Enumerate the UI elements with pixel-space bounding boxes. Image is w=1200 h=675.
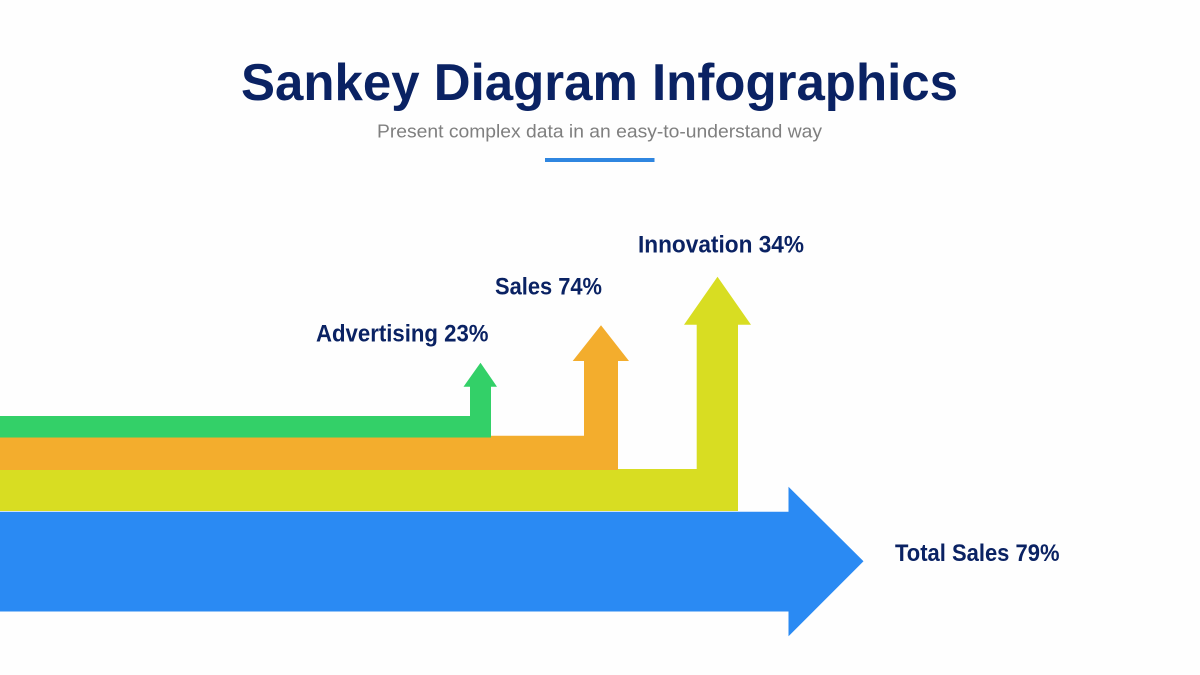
title: Sankey Diagram Infographics <box>241 54 958 112</box>
arrow: sales (orange) <box>0 325 629 470</box>
title underline accent <box>545 158 654 162</box>
label: total sales: Total Sales 79% <box>895 540 1060 567</box>
label: innovation: Innovation 34% <box>638 231 804 258</box>
arrow: innovation (yellow) <box>0 277 751 511</box>
arrow: advertising (green) <box>0 363 497 438</box>
arrow: total sales (blue) <box>0 487 864 636</box>
label: sales: Sales 74% <box>495 274 602 300</box>
label: advertising: Advertising 23% <box>316 320 488 348</box>
subtitle: Present complex data in an easy-to-understand way <box>377 120 823 142</box>
